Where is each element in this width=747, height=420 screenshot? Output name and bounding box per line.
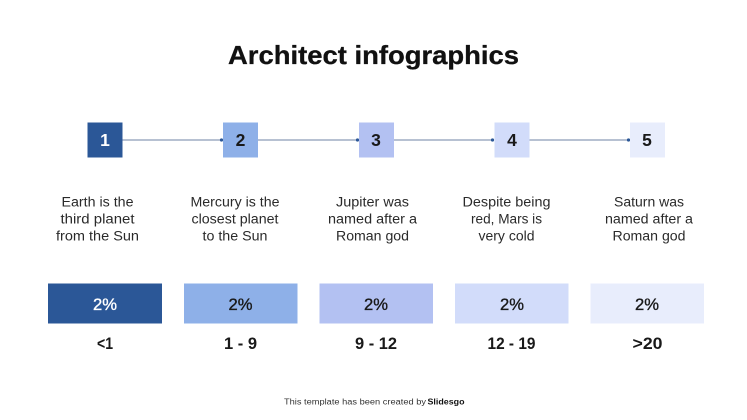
bar 3: 2% (364, 296, 388, 314)
description 4 (462, 194, 550, 244)
step 4 badge (494, 122, 530, 158)
description 4: very cold (478, 228, 534, 244)
connector: 2 to 3 (258, 138, 359, 142)
connector: 1 to 2 (122, 138, 223, 142)
description 3: named after a (328, 212, 418, 226)
bar 3 (320, 284, 433, 324)
title: Architect infographics (228, 40, 519, 70)
bar 4: 2% (500, 296, 524, 314)
footer credit: Slidesgo (428, 398, 465, 406)
bar 1 (48, 284, 162, 324)
range label 4: 12 - 19 (488, 335, 536, 353)
step 4 badge: 4 (507, 130, 517, 150)
description 5: named after a (605, 212, 694, 226)
step 5 badge (630, 122, 665, 158)
description 5 (605, 194, 694, 244)
bar 5 (590, 284, 704, 324)
connector: 4 to 5 (529, 138, 630, 142)
step 5 badge: 5 (642, 130, 652, 150)
step 3 badge (359, 122, 394, 158)
description 1: third planet (60, 212, 135, 226)
range label 2: 1 - 9 (224, 335, 257, 353)
bar 2 (184, 284, 298, 324)
step 2 badge: 2 (236, 130, 246, 150)
bar 5: 2% (635, 296, 659, 314)
step 1 badge (88, 122, 122, 158)
footer credit: This template has been created by (284, 398, 426, 406)
range label 5: >20 (632, 335, 662, 353)
step 2 badge (223, 122, 258, 158)
description 4: red, Mars is (471, 212, 542, 226)
footer credit (284, 398, 465, 406)
description 1 (56, 194, 139, 244)
description 3: Jupiter was (336, 194, 409, 210)
range label 1: <1 (97, 335, 113, 353)
description 3: Roman god (336, 228, 409, 244)
step 3 badge: 3 (371, 130, 381, 150)
bar 1: 2% (93, 296, 117, 314)
bar 2: 2% (228, 296, 253, 314)
description 3 (328, 194, 418, 244)
description 5: Saturn was (614, 194, 684, 210)
description 1: Earth is the (62, 194, 134, 210)
description 1: from the Sun (56, 228, 139, 244)
range label 3: 9 - 12 (355, 335, 397, 353)
description 2: to the Sun (202, 228, 268, 244)
step 1 badge: 1 (100, 130, 110, 150)
connector: 3 to 4 (393, 138, 494, 142)
description 2: closest planet (192, 212, 279, 226)
description 4: Despite being (462, 194, 550, 210)
description 2: Mercury is the (190, 194, 280, 210)
description 5: Roman god (612, 228, 686, 244)
bar 4 (455, 284, 568, 324)
description 2 (190, 194, 280, 244)
